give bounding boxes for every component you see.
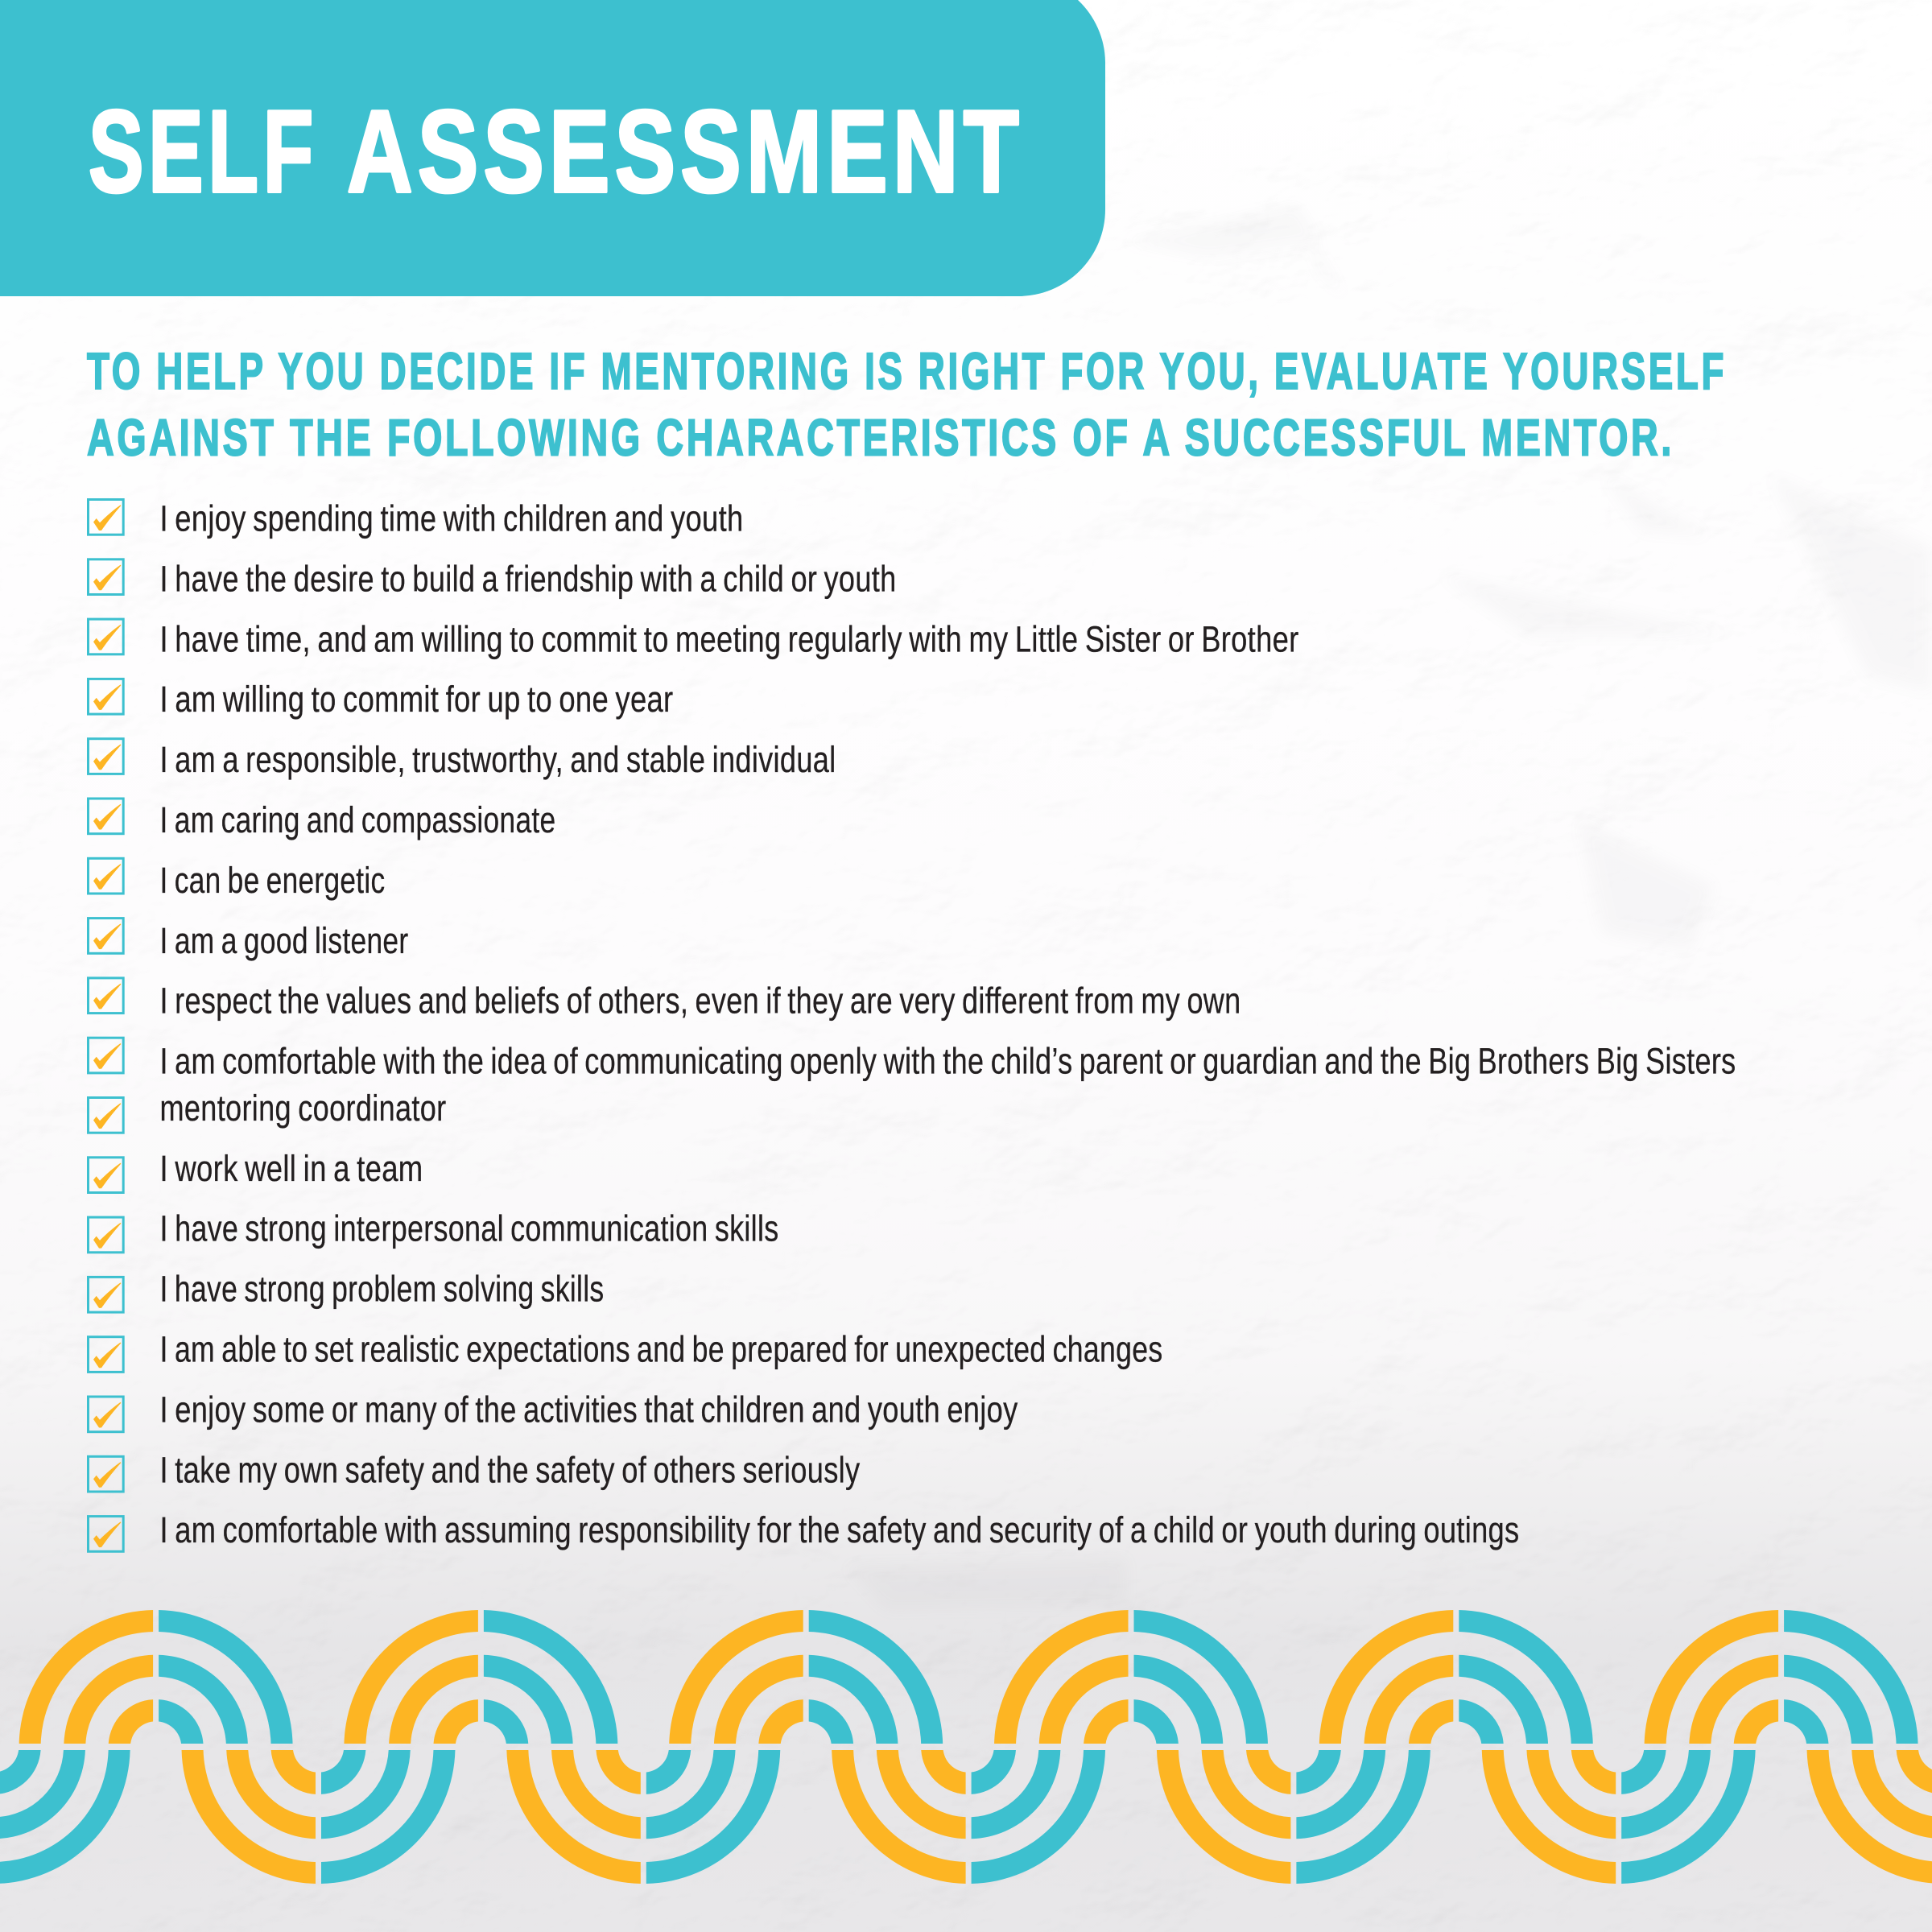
row 14 [89, 1269, 604, 1312]
row 5: I am a responsible, trustworthy, and stable individual [159, 739, 836, 780]
title banner [0, 0, 1105, 296]
row 8 [89, 919, 409, 961]
row 8: I am a good listener [159, 920, 409, 961]
row 6 [89, 799, 555, 840]
row 1: I enjoy spending time with children and youth [159, 497, 744, 539]
row 17: I take my own safety and the safety of others seriously [159, 1449, 861, 1490]
row 13 [89, 1208, 779, 1253]
row 16: I enjoy some or many of the activities that children and youth enjoy [159, 1389, 1018, 1430]
title [89, 86, 1024, 217]
row 9: I respect the values and beliefs of others, even if they are very different from my own [159, 980, 1241, 1022]
row 15: I am able to set realistic expectations and be prepared for unexpected changes [159, 1328, 1162, 1370]
row 12: I work well in a team [159, 1148, 423, 1189]
row 7: I can be energetic [159, 860, 385, 901]
row 14: I have strong problem solving skills [159, 1269, 604, 1310]
row 13: I have strong interpersonal communication skills [159, 1208, 779, 1249]
checklist [89, 497, 1736, 1551]
row 11 [89, 1088, 446, 1133]
title: SELF [89, 86, 318, 217]
row 3: I have time, and am willing to commit to meeting regularly with my Little Sister or Brother [159, 618, 1299, 659]
row 18: I am comfortable with assuming responsibility for the safety and security of a child or youth during outings [159, 1509, 1520, 1550]
row 12 [89, 1148, 423, 1193]
wave pattern [0, 1610, 1932, 1884]
subheading [87, 342, 1727, 467]
row 4: I am willing to commit for up to one year [159, 679, 673, 720]
row 2: I have the desire to build a friendship with a child or youth [159, 558, 897, 599]
title: ASSESSMENT [347, 86, 1024, 217]
row 11: mentoring coordinator [159, 1088, 446, 1129]
row 6: I am caring and compassionate [159, 799, 555, 840]
row 7 [89, 858, 385, 901]
